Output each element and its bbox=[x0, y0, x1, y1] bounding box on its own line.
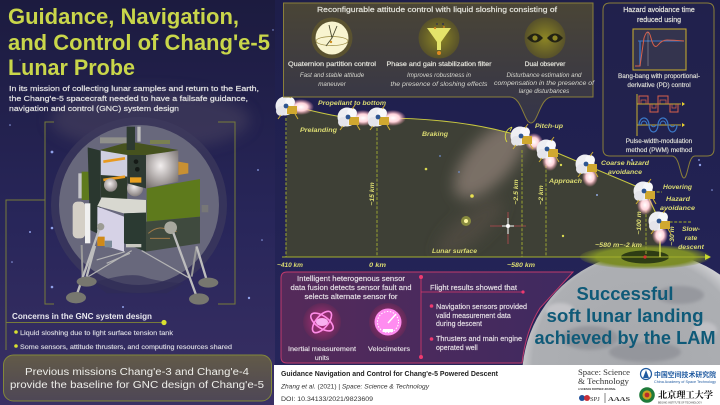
title: Lunar Probe bbox=[8, 55, 135, 80]
flight results: during descent bbox=[436, 321, 482, 328]
control method descriptions: Fast and stable attitude bbox=[300, 72, 365, 79]
distance labels: 0 km bbox=[369, 262, 386, 269]
background: left column bbox=[0, 0, 275, 405]
panel: hazard avoidance: reduced using bbox=[637, 17, 681, 24]
trajectory curve bbox=[287, 105, 660, 222]
panel: sensor fusion and flight results bbox=[281, 272, 573, 363]
trajectory labels bbox=[300, 100, 705, 255]
flight results: Navigation sensors provided bbox=[436, 304, 527, 311]
concerns list: Some sensors, attitude thrusters, and computing resources shared bbox=[20, 344, 232, 351]
panel: hazard avoidance: Hazard avoidance time bbox=[623, 7, 695, 14]
altitude dashed lines bbox=[286, 118, 692, 257]
illustration: Chang'e-5 lander bbox=[66, 127, 218, 305]
panel: reconfigurable attitude control: Reconfigurable attitude control with liquid sloshing consisting of bbox=[317, 5, 558, 14]
icon: inertial measurement unit bbox=[303, 303, 341, 341]
concerns list: Concerns in the GNC system design bbox=[12, 312, 152, 321]
sensor labels: units bbox=[315, 355, 330, 362]
intro text: navigation and control (GNC) system design bbox=[9, 104, 179, 113]
logo: Space Science & Technology: A SCIENCE PARTNER JOURNAL bbox=[578, 387, 616, 391]
distance labels: ~580 km bbox=[507, 262, 535, 269]
distance labels: ~100 m bbox=[636, 211, 643, 235]
trajectory labels: Hazard bbox=[666, 196, 691, 203]
intro text bbox=[9, 84, 259, 113]
sensor fusion text: selects alternate sensor for bbox=[304, 294, 398, 301]
icon: velocimeter bbox=[369, 303, 407, 341]
panel: hazard avoidance: method (PWM) method bbox=[626, 147, 692, 154]
trajectory labels: Propellant to bottom bbox=[318, 100, 386, 107]
intro text: In its mission of collecting lunar samples and return to the Earth, bbox=[9, 84, 259, 93]
flight results bbox=[430, 283, 527, 352]
distance labels: ~2 km bbox=[538, 185, 545, 205]
trajectory labels: rate bbox=[685, 235, 697, 242]
landing outcome headline bbox=[534, 284, 716, 348]
landers along trajectory bbox=[276, 94, 671, 245]
trajectory labels: Pitch-up bbox=[535, 123, 563, 130]
sensor labels bbox=[288, 346, 411, 362]
control method descriptions: compensation in the presence of bbox=[494, 80, 595, 87]
landing outcome headline: achieved by the LAM bbox=[534, 328, 716, 348]
panel: hazard avoidance bbox=[603, 3, 714, 178]
panel: previous missions bbox=[4, 355, 272, 401]
panel: hazard avoidance: Pulse-width-modulation bbox=[626, 138, 693, 145]
logo: Space Science & Technology: AAAS bbox=[608, 396, 630, 403]
trajectory labels: Approach bbox=[548, 178, 582, 185]
icon: dual observer eyes bbox=[524, 18, 566, 58]
concerns list: Liquid sloshing due to light surface tension tank bbox=[20, 330, 174, 337]
logo: Space Science & Technology: Space: Science bbox=[578, 368, 630, 377]
lander backdrop circle bbox=[51, 117, 227, 293]
flight results: valid measurement data bbox=[436, 313, 511, 320]
citation bbox=[280, 369, 499, 403]
panel: previous missions: provide the baseline for GNC design of Chang'e-5 bbox=[10, 380, 264, 391]
trajectory labels: Slow- bbox=[682, 226, 701, 233]
sensor labels: Velocimeters bbox=[368, 346, 411, 353]
landing outcome headline: soft lunar landing bbox=[546, 306, 704, 326]
control method descriptions: Disturbance estimation and bbox=[507, 72, 582, 79]
control method descriptions: maneuver bbox=[318, 81, 347, 88]
sensor fusion text: data fusion detects sensor fault and bbox=[290, 285, 412, 292]
logo: China Academy of Space Technology: 中国空间技术研究院 bbox=[654, 370, 716, 379]
control method labels: Phase and gain stabilization filter bbox=[386, 61, 492, 68]
logo: Space Science & Technology: & Technology bbox=[578, 377, 630, 386]
logo: Beijing Institute of Technology: 北京理工大学 bbox=[658, 388, 713, 401]
sparkle stars bbox=[425, 155, 598, 244]
moon bbox=[523, 252, 720, 365]
control method descriptions: Improves robustness in bbox=[407, 72, 472, 79]
control method labels: Quaternion partition control bbox=[288, 61, 377, 68]
trajectory labels: descent bbox=[678, 244, 705, 251]
landing outcome headline: Successful bbox=[576, 284, 674, 304]
distance labels: ~30 m bbox=[669, 226, 676, 246]
trajectory labels: Coarse hazard bbox=[601, 160, 650, 167]
chart: PWM waves bbox=[637, 94, 685, 136]
concerns list bbox=[6, 312, 232, 351]
footer band bbox=[274, 365, 720, 405]
background: purple nebula bbox=[50, 90, 250, 150]
distance labels: ~15 km bbox=[369, 182, 376, 206]
distance labels: ~2.5 km bbox=[513, 179, 520, 205]
sensor labels: Inertial measurement bbox=[288, 346, 356, 353]
logo: Beijing Institute of Technology bbox=[639, 387, 713, 404]
trajectory labels: Hovering bbox=[663, 184, 693, 191]
logo: Space Science & Technology bbox=[578, 368, 630, 403]
intro text: the Chang'e-5 spacecraft needed to have a failsafe guidance, bbox=[9, 94, 248, 103]
milky way haze bbox=[440, 128, 530, 255]
trajectory labels: avoidance bbox=[660, 205, 695, 212]
logo: Space Science & Technology: SPJ bbox=[590, 396, 600, 403]
trajectory labels: Braking bbox=[422, 131, 449, 138]
stars bbox=[9, 29, 713, 308]
trajectory labels: avoidance bbox=[608, 169, 642, 176]
panel: previous missions: Previous missions Chang'e-3 and Chang'e-4 bbox=[25, 367, 249, 378]
trajectory labels: ~580 m~-2 km bbox=[595, 242, 642, 249]
sensor fusion text bbox=[290, 276, 412, 301]
sensor fusion text: Intelligent heterogenous sensor bbox=[297, 276, 406, 283]
control method descriptions bbox=[300, 72, 595, 95]
control method descriptions: the presence of sloshing effects bbox=[390, 81, 488, 88]
control method labels: Dual observer bbox=[525, 61, 566, 68]
control method descriptions: large disturbances bbox=[519, 88, 569, 95]
icon: funnel filter bbox=[418, 18, 460, 58]
title: Guidance, Navigation, bbox=[8, 4, 239, 29]
flight results: operated well bbox=[436, 345, 478, 352]
title: and Control of Chang'e-5 bbox=[8, 30, 270, 55]
trajectory labels: Prelanding bbox=[300, 127, 338, 134]
citation: DOI: 10.34133/2021/9823609 bbox=[281, 396, 373, 403]
logo: Beijing Institute of Technology: BEIJING INSTITUTE OF TECHNOLOGY bbox=[658, 400, 702, 404]
logo: China Academy of Space Technology bbox=[640, 368, 716, 384]
citation: Zhang et al. (2021) | Space: Science & Technology bbox=[280, 384, 430, 390]
landing site bbox=[580, 245, 710, 269]
lander frame brackets bbox=[6, 122, 235, 350]
distance labels bbox=[277, 179, 676, 269]
trajectory labels: Lunar surface bbox=[432, 248, 477, 255]
icon: quaternion sphere bbox=[312, 18, 352, 58]
panel: hazard avoidance: derivative (PD) control bbox=[627, 82, 691, 89]
distance labels: ~410 km bbox=[277, 262, 303, 269]
title bbox=[8, 4, 270, 80]
surface axis bbox=[282, 240, 711, 260]
trajectory area bbox=[286, 107, 660, 257]
logo: China Academy of Space Technology: China Academy of Space Technology bbox=[654, 380, 716, 384]
citation: Guidance Navigation and Control for Chang'e-5 Powered Descent bbox=[281, 369, 499, 378]
flight results: Flight results showed that bbox=[430, 283, 517, 292]
flight results: Thrusters and main engine bbox=[436, 336, 522, 343]
chart: PD step response bbox=[633, 29, 686, 70]
panel: hazard avoidance: Bang-bang with proportional- bbox=[618, 73, 700, 80]
panel: reconfigurable attitude control bbox=[284, 3, 595, 123]
control method labels bbox=[288, 61, 566, 68]
